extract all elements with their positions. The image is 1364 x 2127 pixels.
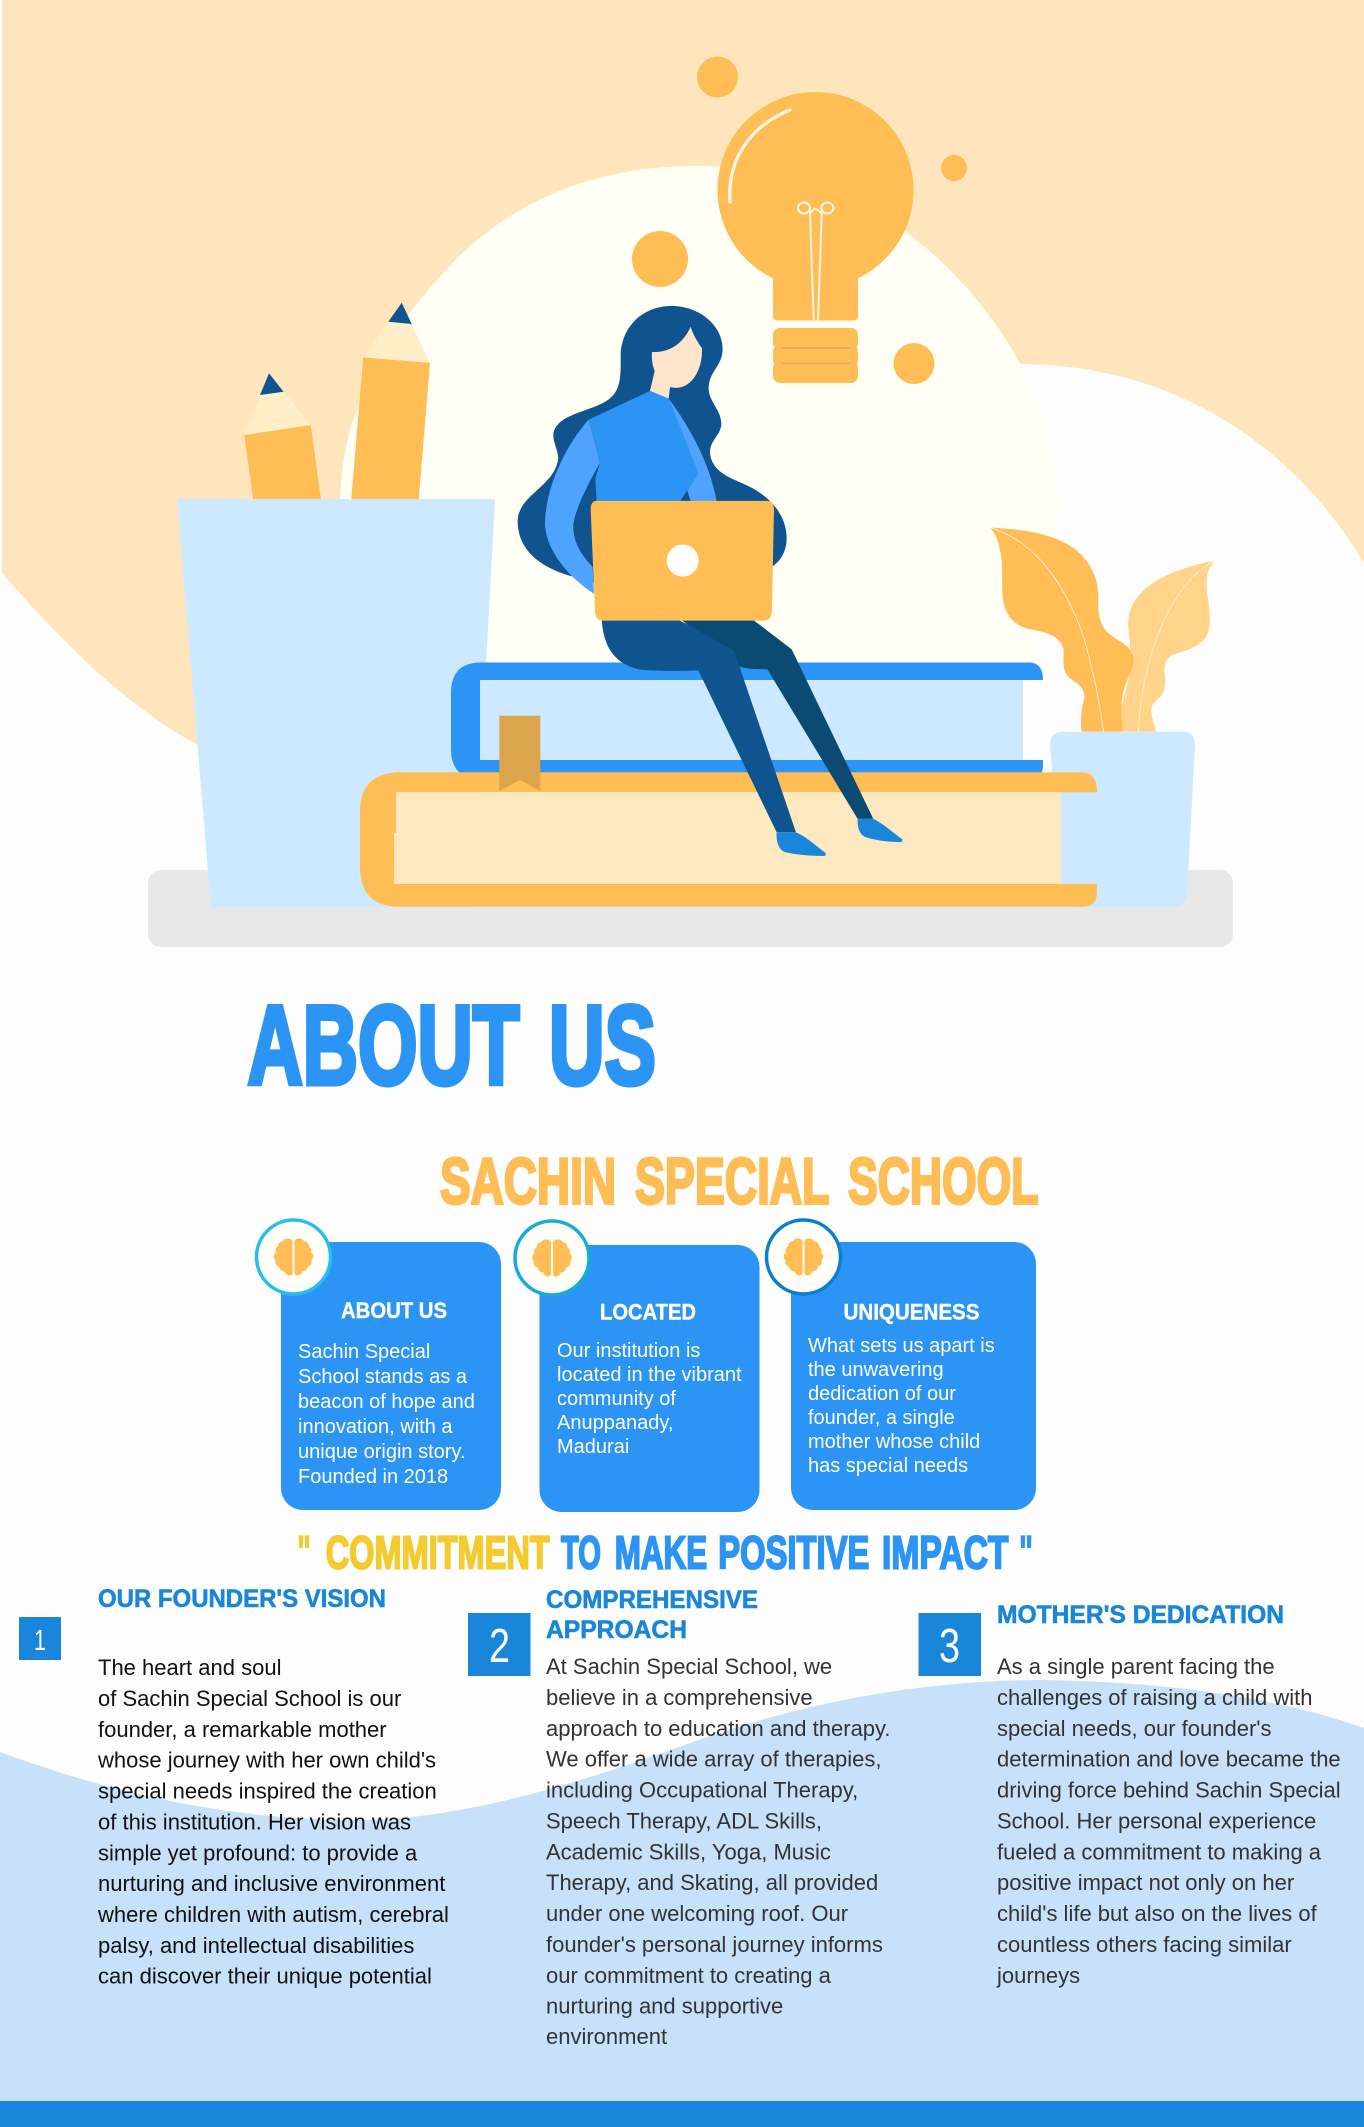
heading [546, 1586, 758, 1644]
title: about us: ABOUT [248, 983, 520, 1108]
body text [546, 1654, 891, 2049]
body text: challenges of raising a child with [997, 1685, 1313, 1710]
card text: Anuppanady, [557, 1412, 673, 1434]
number badge 2: 2 [489, 1620, 510, 1673]
body text: Therapy, and Skating, all provided [546, 1870, 878, 1895]
panel: founder's vision [19, 1585, 449, 1988]
body text: nurturing and inclusive environment [98, 1871, 445, 1896]
card text: community of [557, 1388, 676, 1410]
icon: brain in circle [766, 1220, 840, 1294]
decorative circle right [941, 155, 967, 181]
number badge 3: 3 [939, 1620, 960, 1673]
card title: LOCATED [600, 1300, 696, 1324]
blue book [451, 662, 1043, 779]
heading: MOTHER'S DEDICATION [997, 1601, 1284, 1629]
card text: What sets us apart is [808, 1335, 995, 1357]
card text: Madurai [557, 1436, 629, 1458]
body text: our commitment to creating a [546, 1963, 832, 1988]
pencil cup [177, 499, 495, 907]
plant leaves [990, 527, 1214, 732]
heading: commitment line [297, 1526, 1033, 1578]
card title: UNIQUENESS [844, 1300, 980, 1324]
body text: determination and love became the [997, 1746, 1341, 1772]
body text: simple yet profound: to provide a [98, 1840, 418, 1866]
panel: mother's dedication [918, 1601, 1341, 1988]
heading: commitment line: " [1019, 1526, 1033, 1578]
card text: School stands as a [298, 1366, 468, 1388]
body text: where children with autism, cerebral [97, 1902, 449, 1927]
icon: brain in circle [256, 1220, 330, 1294]
body text: fueled a commitment to making a [997, 1840, 1322, 1864]
card text [808, 1335, 995, 1477]
heading: school name: SPECIAL [635, 1144, 830, 1218]
body text: At Sachin Special School, we [546, 1654, 832, 1679]
body text: of this institution. Her vision was [98, 1810, 411, 1834]
icon: left pencil [244, 373, 322, 505]
body text: of Sachin Special School is our [98, 1686, 401, 1711]
card text: beacon of hope and [298, 1391, 475, 1413]
card text: located in the vibrant [557, 1364, 742, 1386]
number badge 1: 1 [34, 1625, 46, 1657]
card title: ABOUT US [341, 1298, 447, 1323]
title: about us: US [549, 983, 656, 1108]
card text: unique origin story. [298, 1441, 466, 1463]
body text: We offer a wide array of therapies, [546, 1746, 881, 1772]
bookmark [499, 716, 540, 791]
decorative circle left [632, 231, 688, 287]
body text [996, 1654, 1341, 1988]
body text: School. Her personal experience [997, 1808, 1316, 1834]
orange book [360, 772, 1097, 907]
card text: the unwavering [808, 1359, 944, 1381]
body text: founder, a remarkable mother [98, 1717, 387, 1742]
heading: commitment line: TO [561, 1526, 601, 1578]
body text: special needs inspired the creation [98, 1778, 437, 1804]
card text: Sachin Special [298, 1341, 430, 1363]
body text: including Occupational Therapy, [546, 1778, 858, 1802]
card text: dedication of our [808, 1383, 956, 1405]
card text: Our institution is [557, 1340, 700, 1362]
heading: school name: SCHOOL [848, 1144, 1038, 1218]
body text: under one welcoming roof. Our [546, 1901, 848, 1926]
card text: has special needs [808, 1455, 968, 1477]
plant pot [1050, 732, 1195, 907]
card text [557, 1340, 742, 1458]
heading: commitment line: COMMITMENT [326, 1526, 550, 1578]
body text: Academic Skills, Yoga, Music [546, 1840, 831, 1864]
panel: comprehensive approach [468, 1586, 891, 2049]
shelf [148, 870, 1233, 947]
body text: child's life but also on the lives of [997, 1901, 1318, 1926]
body text: special needs, our founder's [997, 1716, 1271, 1741]
card text: innovation, with a [298, 1416, 453, 1438]
body text: Speech Therapy, ADL Skills, [546, 1808, 822, 1834]
icon: right pencil [351, 303, 430, 505]
icon: brain in circle [515, 1221, 589, 1295]
body text: palsy, and intellectual disabilities [98, 1933, 414, 1958]
body text [97, 1655, 449, 1988]
body text: countless others facing similar [997, 1932, 1292, 1957]
heading: commitment line: POSITIVE [718, 1526, 869, 1578]
body text: can discover their unique potential [98, 1964, 432, 1988]
heading: school name [440, 1144, 1038, 1218]
panel: uniqueness card [766, 1220, 1036, 1510]
decorative circle top [697, 56, 738, 98]
card text: mother whose child [808, 1431, 980, 1453]
body text: The heart and soul [98, 1655, 281, 1680]
number badge 2 [468, 1613, 530, 1676]
body text: environment [546, 2024, 667, 2049]
body text: whose journey with her own child's [97, 1748, 436, 1772]
icon: light bulb [718, 92, 914, 383]
heading: COMPREHENSIVE [546, 1586, 758, 1614]
heading: commitment line: IMPACT [882, 1526, 1008, 1578]
footer bar [0, 2101, 1364, 2127]
heading: commitment line: " [297, 1526, 311, 1578]
body text: driving force behind Sachin Special [997, 1778, 1341, 1802]
body text: nurturing and supportive [546, 1994, 783, 2018]
heading: OUR FOUNDER'S VISION [98, 1585, 386, 1613]
panel: located card [515, 1221, 760, 1512]
person with laptop [518, 306, 903, 856]
body text: As a single parent facing the [997, 1654, 1275, 1679]
heading: commitment line: MAKE [615, 1526, 707, 1578]
number badge 3 [918, 1613, 981, 1676]
heading: APPROACH [546, 1616, 687, 1644]
body text: believe in a comprehensive [546, 1685, 813, 1710]
heading: school name: SACHIN [440, 1144, 616, 1218]
card text [298, 1341, 475, 1488]
body text: positive impact not only on her [997, 1870, 1294, 1895]
decorative circle lower right [894, 343, 934, 384]
body text: founder's personal journey informs [546, 1932, 883, 1957]
card text: founder, a single [808, 1407, 955, 1429]
body text: journeys [996, 1963, 1080, 1988]
body text: approach to education and therapy. [546, 1716, 891, 1741]
top peach wave background [2, 0, 1364, 790]
number badge 1 [19, 1617, 61, 1660]
panel: about us card [256, 1220, 501, 1510]
card text: Founded in 2018 [298, 1466, 448, 1488]
bottom light blue wave background [0, 1680, 1364, 2127]
cream blob behind person [340, 166, 1059, 663]
